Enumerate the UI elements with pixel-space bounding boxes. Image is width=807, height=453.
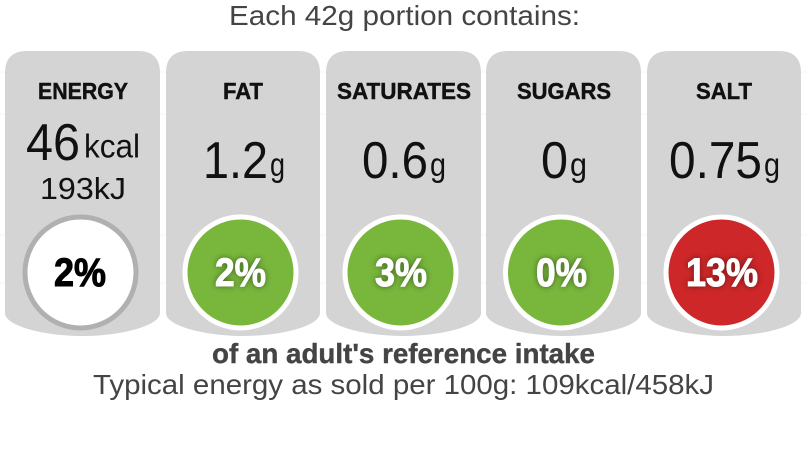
energy label: ENERGY bbox=[38, 78, 128, 104]
fat percentage circle: 2% bbox=[215, 251, 266, 295]
sugars percentage circle: 0% bbox=[536, 251, 587, 295]
panel: fat bbox=[166, 51, 320, 336]
salt percentage circle: 13% bbox=[686, 251, 758, 295]
fat percentage circle bbox=[185, 217, 296, 328]
typical energy note: Typical energy as sold per 100g: 109kcal/458kJ bbox=[93, 369, 714, 400]
sugars label: SUGARS bbox=[517, 78, 611, 104]
sugars value: 0 bbox=[541, 132, 568, 190]
energy percentage circle: 2% bbox=[54, 251, 106, 295]
saturates value: 0.6 bbox=[362, 132, 428, 190]
saturates percentage circle bbox=[345, 217, 456, 328]
kcal unit: kcal bbox=[84, 128, 140, 164]
fat unit: g bbox=[270, 146, 285, 183]
panel: salt bbox=[647, 51, 801, 336]
panel: energy bbox=[5, 51, 160, 336]
energy kcal value: 46 bbox=[26, 114, 80, 172]
salt percentage circle bbox=[666, 217, 777, 328]
saturates label: SATURATES bbox=[337, 78, 471, 104]
heading: portion size: Each 42g portion contains: bbox=[229, 0, 580, 31]
fat value: 1.2 bbox=[203, 132, 268, 190]
panel: saturates bbox=[326, 51, 481, 336]
saturates unit: g bbox=[430, 146, 446, 183]
panel: sugars bbox=[486, 51, 641, 336]
reference intake caption: of an adult's reference intake bbox=[212, 338, 595, 369]
energy percentage circle bbox=[25, 217, 136, 328]
sugars percentage circle bbox=[506, 217, 616, 328]
saturates percentage circle: 3% bbox=[375, 251, 427, 295]
salt value: 0.75 bbox=[669, 132, 762, 190]
sugars unit: g bbox=[570, 146, 587, 183]
salt unit: g bbox=[764, 146, 780, 183]
fat label: FAT bbox=[223, 78, 263, 104]
salt label: SALT bbox=[696, 78, 752, 104]
energy kJ value: 193kJ bbox=[40, 171, 126, 206]
